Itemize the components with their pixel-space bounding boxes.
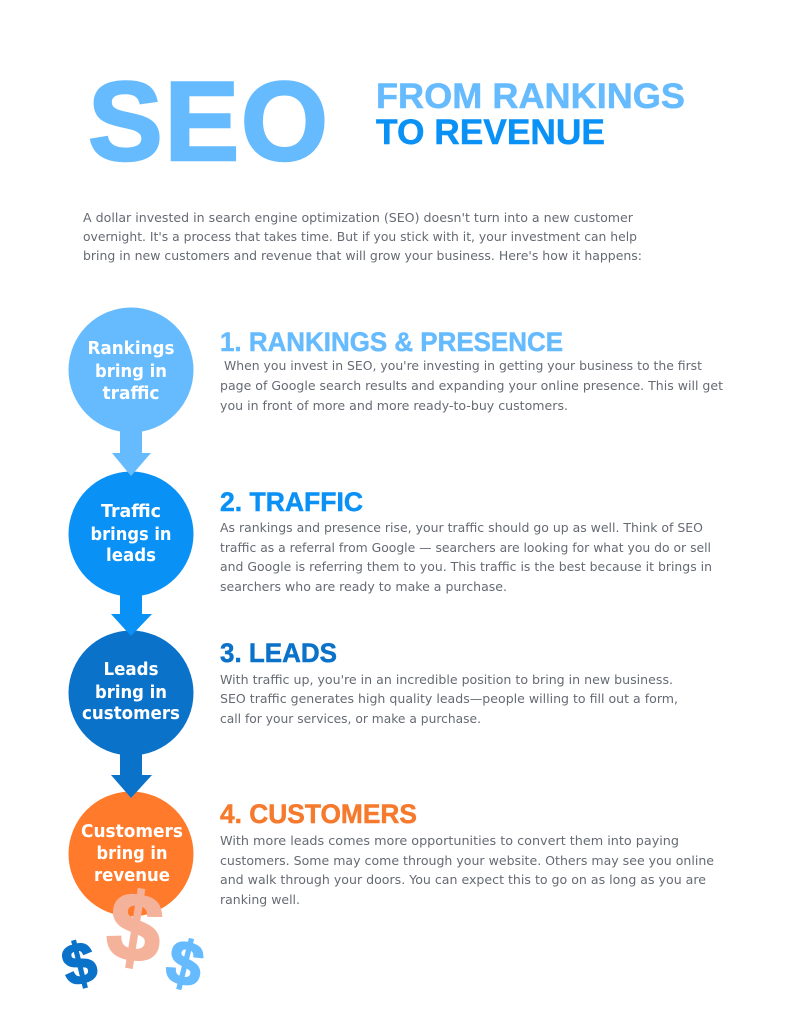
- section 1: [220, 327, 723, 413]
- intro text: overnight. It's a process that takes time. But if you stick with it, your investment can help: [83, 229, 637, 244]
- step circle: traffic: brings in: [90, 525, 172, 545]
- arrow: traffic to leads: [111, 592, 152, 636]
- step circle: rankings: traffic: [102, 384, 160, 404]
- step circle: traffic: [68, 472, 194, 596]
- section 2: 2. TRAFFIC: [220, 487, 363, 517]
- step circle: traffic: Traffic: [101, 502, 161, 522]
- section 4: [220, 799, 714, 907]
- section 1: page of Google search results and expanding your online presence. This will get: [220, 378, 723, 393]
- section 1: you in front of more and more ready-to-buy customers.: [220, 398, 568, 413]
- intro text: bring in new customers and revenue that will grow your business. Here's how it happens:: [83, 248, 642, 263]
- section 4: With more leads comes more opportunities to convert them into paying: [220, 833, 679, 848]
- step circle: customers: Customers: [81, 822, 183, 842]
- icon: light blue dollar: $: [160, 926, 210, 1002]
- step circle: leads: [68, 630, 194, 756]
- subtitle: TO REVENUE: [376, 113, 605, 152]
- arrow: rankings to traffic: [112, 428, 151, 476]
- section 2: As rankings and presence rise, your traffic should go up as well. Think of SEO: [220, 520, 703, 535]
- arrow: leads to customers: [111, 751, 152, 798]
- step circle: customers: revenue: [94, 866, 170, 886]
- section 3: 3. LEADS: [220, 638, 337, 668]
- section 4: ranking well.: [220, 892, 300, 907]
- section 2: [220, 487, 712, 594]
- step circle: customers: [68, 792, 194, 916]
- section 1: When you invest in SEO, you're investing in getting your business to the first: [224, 358, 702, 373]
- step circle: rankings: Rankings: [88, 339, 174, 359]
- subtitle: [376, 77, 685, 152]
- icon: blue dollar: $: [56, 929, 103, 1000]
- intro text: [83, 210, 642, 263]
- step circle: leads: Leads: [104, 660, 158, 680]
- section 4: 4. CUSTOMERS: [220, 799, 417, 829]
- section 4: and walk through your doors. You can expect this to go on as long as you are: [220, 872, 706, 887]
- title: SEO: SEO: [88, 59, 328, 184]
- icon: large dollar: $: [100, 871, 170, 985]
- section 4: customers. Some may come through your website. Others may see you online: [220, 853, 714, 868]
- subtitle: FROM RANKINGS: [376, 77, 685, 116]
- section 3: SEO traffic generates high quality leads—people willing to fill out a form,: [220, 691, 678, 706]
- step circle: traffic: leads: [106, 546, 156, 566]
- section 2: traffic as a referral from Google — searchers are looking for what you do or sell: [220, 540, 711, 555]
- section 2: and Google is referring them to you. This traffic is the best because it brings in: [220, 559, 712, 574]
- section 3: call for your services, or make a purchase.: [220, 711, 481, 726]
- section 3: With traffic up, you're in an incredible position to bring in new business.: [220, 672, 673, 687]
- step circle: leads: bring in: [95, 683, 167, 703]
- section 3: [220, 638, 678, 726]
- step circle: rankings: [68, 308, 194, 432]
- section 1: 1. RANKINGS & PRESENCE: [220, 327, 563, 357]
- step circle: customers: bring in: [96, 844, 168, 864]
- intro text: A dollar invested in search engine optimization (SEO) doesn't turn into a new customer: [83, 210, 634, 225]
- step circle: leads: customers: [82, 704, 180, 724]
- step circle: rankings: bring in: [95, 362, 167, 382]
- section 2: searchers who are ready to make a purchase.: [220, 579, 507, 594]
